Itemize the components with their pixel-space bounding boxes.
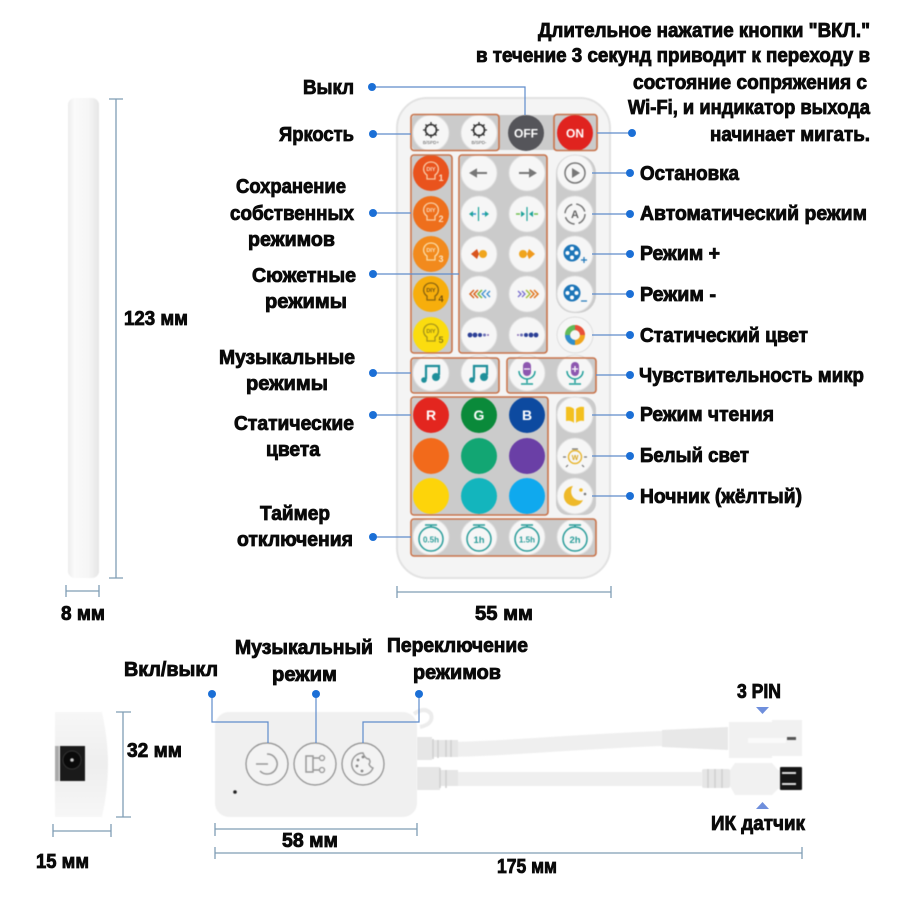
on button: [557, 115, 593, 151]
left labels: Выкл: [303, 77, 354, 99]
static colour buttons: [413, 397, 545, 514]
left labels: режимы: [265, 291, 347, 313]
dimension: remote height: 123 мм: [124, 308, 188, 330]
right labels: Белый свет: [640, 445, 749, 467]
DIY buttons: 5: [438, 335, 444, 345]
mode switch button: [342, 743, 384, 785]
static colour buttons: R: [426, 407, 436, 423]
side view of remote: [68, 98, 99, 578]
static colour buttons: G: [474, 407, 485, 423]
control buttons: stop, auto, mode plus, mode minus: [557, 155, 593, 312]
left labels: режимы: [246, 373, 328, 395]
DIY buttons: DIY: [426, 329, 436, 335]
control buttons: stop, auto, mode plus, mode minus: A: [571, 209, 579, 221]
right labels: Остановка: [640, 163, 740, 185]
left labels: Яркость: [279, 124, 354, 146]
dimension: remote thickness: 8 мм: [61, 603, 105, 625]
DIY buttons: 1: [438, 173, 444, 183]
controller box: [215, 710, 432, 817]
button group backgrounds: [412, 115, 598, 556]
right labels: Статический цвет: [640, 325, 808, 347]
DIY buttons: 3: [438, 254, 444, 264]
controller labels: Вкл/выкл: [124, 659, 218, 681]
right labels: [639, 163, 867, 508]
reading, white light and night light buttons: W: [572, 455, 579, 462]
left labels: Таймер: [260, 503, 330, 525]
right labels: Чувствительность микр: [639, 365, 864, 387]
static colour buttons: B: [522, 407, 532, 423]
DIY buttons: [413, 155, 449, 353]
timer buttons: 1h: [473, 535, 485, 546]
controller labels: режимов: [413, 662, 501, 684]
note: long press of ON button: начинает мигать.: [710, 124, 870, 146]
3 pin connector: [729, 720, 802, 758]
dimension: controller height: [116, 712, 182, 817]
dimension: remote width: 55 мм: [475, 603, 533, 625]
IR sensor connector: [702, 763, 802, 795]
indicator hole: [233, 790, 237, 794]
DIY buttons: 4: [438, 294, 444, 304]
controller labels: Переключение: [387, 635, 528, 657]
orange group outlines: [411, 114, 597, 556]
dimension: controller height: 32 мм: [127, 740, 182, 762]
DIY buttons: DIY: [426, 248, 436, 254]
left labels: отключения: [237, 529, 353, 551]
left labels: Сюжетные: [252, 265, 356, 287]
dimension: total length: 175 мм: [497, 856, 557, 878]
leader lines and dots, remote: [368, 83, 636, 541]
right labels: Режим +: [640, 243, 720, 265]
left labels: цвета: [266, 439, 321, 461]
brightness buttons: [413, 115, 497, 151]
dimension: remote thickness: [61, 585, 105, 625]
controller labels: [124, 635, 528, 686]
on button: ON: [566, 126, 584, 140]
controller leader lines: [208, 690, 423, 743]
left labels: режимов: [248, 229, 335, 251]
DIY buttons: DIY: [426, 167, 436, 173]
controller labels: Музыкальный: [235, 637, 373, 659]
brightness buttons: B/SPD-: [471, 140, 487, 145]
timer buttons: 0.5h: [423, 536, 439, 544]
left labels: Музыкальные: [219, 347, 355, 369]
remote control: [397, 98, 610, 578]
DIY buttons: DIY: [426, 208, 436, 214]
dimension: remote width: [397, 586, 611, 625]
dimension: controller length: [215, 823, 417, 852]
timer buttons: 1.5h: [519, 536, 535, 544]
microphone sensitivity buttons: [509, 355, 593, 391]
left labels: [219, 77, 356, 551]
note: long press of ON button: в течение 3 секунд приводит к переходу в: [476, 45, 870, 67]
dimension: controller depth: [36, 824, 111, 873]
dimension: controller length: 58 мм: [282, 830, 338, 852]
DIY buttons: 2: [438, 214, 444, 224]
3 pin label: 3 PIN: [737, 681, 781, 703]
note: long press of ON button: Длительное нажатие кнопки "ВКЛ.": [538, 20, 870, 42]
right labels: Режим чтения: [640, 404, 774, 426]
DIY buttons: DIY: [426, 288, 436, 294]
left labels: собственных: [230, 203, 354, 225]
3 pin label: [737, 681, 781, 714]
controller labels: режим: [272, 664, 337, 686]
dimension: controller depth: 15 мм: [36, 851, 89, 873]
off button: [508, 115, 544, 151]
power button: [246, 743, 288, 785]
dimension: total length: [215, 847, 802, 878]
scene mode buttons: [461, 155, 545, 353]
off button: OFF: [514, 126, 538, 140]
static colour wheel button: [557, 317, 593, 353]
IR sensor label: ИК датчик: [711, 813, 806, 835]
note: long press of ON button: [476, 20, 871, 146]
remote body: [397, 98, 610, 578]
left labels: Сохранение: [236, 176, 346, 198]
right labels: Ночник (жёлтый): [640, 486, 802, 508]
IR sensor label: [711, 802, 806, 835]
dimension: remote height: [109, 99, 188, 578]
note: long press of ON button: состояние сопряжения с: [633, 72, 867, 94]
brightness buttons: B/SPD+: [423, 140, 439, 145]
timer buttons: [413, 519, 593, 555]
right labels: Автоматический режим: [640, 203, 867, 225]
left labels: Статические: [234, 413, 354, 435]
right labels: Режим -: [640, 284, 716, 306]
note: long press of ON button: Wi-Fi, и индикатор выхода: [628, 97, 871, 119]
controller end view: [55, 712, 108, 817]
cables: [417, 727, 728, 790]
music mode button: [294, 743, 336, 785]
music buttons: [413, 355, 497, 391]
timer buttons: 2h: [569, 535, 581, 546]
reading, white light and night light buttons: [557, 397, 593, 514]
